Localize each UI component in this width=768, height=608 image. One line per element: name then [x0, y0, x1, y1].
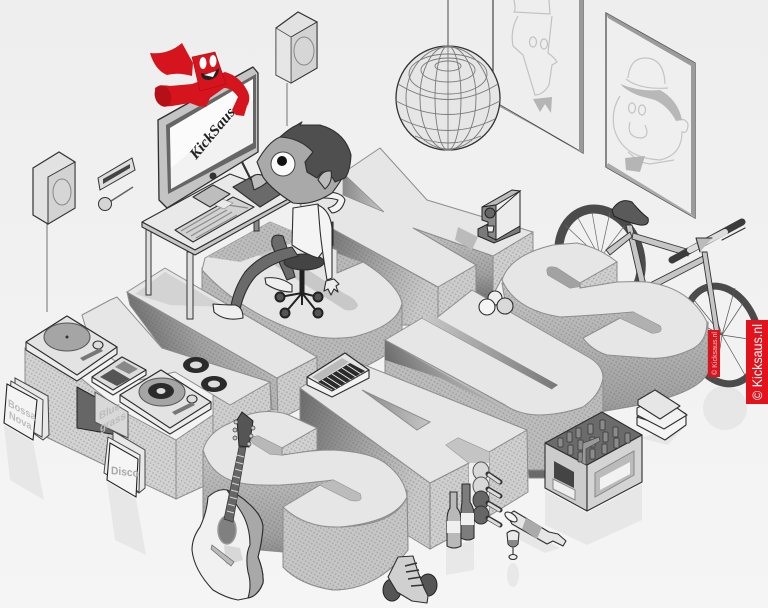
dj mixer [92, 357, 146, 395]
beer crate [545, 412, 642, 511]
disco ball [396, 0, 500, 150]
wall speaker left [33, 152, 75, 312]
tablet [233, 160, 284, 207]
far shoe [265, 278, 292, 292]
KickSaus screen logo: KickSaus [186, 105, 239, 163]
near leg [231, 247, 298, 309]
letter U [385, 290, 603, 470]
torso shirt [292, 204, 328, 258]
hand [324, 279, 339, 295]
wall poster: stout man [606, 13, 695, 218]
computer monitor [158, 67, 258, 208]
chair base [276, 265, 322, 318]
bluegrass sleeve text: grass [100, 409, 126, 435]
letter S right [502, 243, 708, 478]
near arm [318, 205, 332, 280]
stacked bottles in rack [473, 462, 500, 525]
desk [142, 174, 292, 319]
ear [318, 171, 331, 189]
record crate block [25, 348, 213, 499]
floor reflections [4, 386, 747, 587]
record sleeve: Bossa Nova: Bossa [8, 398, 36, 424]
keyboard [175, 197, 254, 242]
far leg [272, 235, 295, 280]
red label large [746, 320, 768, 404]
raised arm [324, 192, 345, 213]
synth keyboard [307, 353, 369, 397]
espresso machine [478, 190, 520, 243]
letter S front [203, 412, 408, 590]
record sleeve: Bossa Nova [4, 378, 49, 440]
turntable left [26, 316, 117, 381]
bicycle handlebars [672, 222, 745, 260]
wall switch and lollipop [98, 158, 135, 210]
stack of books [637, 390, 687, 440]
chair back [318, 222, 333, 252]
fallen wine bottle [503, 510, 566, 546]
record sleeve: Bossa Nova: Nova [9, 410, 32, 433]
record sleeve: Disco [104, 431, 145, 497]
red label large: © Kicksaus.nl [750, 324, 765, 400]
vinyl records [183, 357, 227, 392]
wall poster: thin man [493, 0, 583, 153]
wine bottles [447, 484, 474, 548]
wine glass [507, 530, 519, 560]
chair seat [284, 254, 324, 270]
designer character [213, 122, 351, 319]
red label small: © Kicksaus.nl [710, 332, 719, 375]
bicycle [545, 197, 768, 394]
hair [280, 122, 351, 182]
near shoe [213, 304, 243, 319]
red mascot [150, 43, 249, 116]
juggling balls [479, 291, 513, 315]
record sleeve: Disco: Disco [111, 465, 139, 480]
hiking boots [383, 556, 437, 603]
eye [271, 152, 295, 176]
letter A [300, 358, 528, 549]
turntable right [120, 370, 211, 434]
letter Y strips [82, 268, 317, 440]
letter K [300, 148, 533, 325]
bicycle saddle [612, 201, 648, 225]
acoustic guitar [192, 412, 263, 600]
bluegrass sleeve text: Blue [99, 400, 120, 423]
head [257, 127, 350, 204]
letter S under the chair [202, 222, 402, 372]
wall speaker right [276, 12, 317, 126]
